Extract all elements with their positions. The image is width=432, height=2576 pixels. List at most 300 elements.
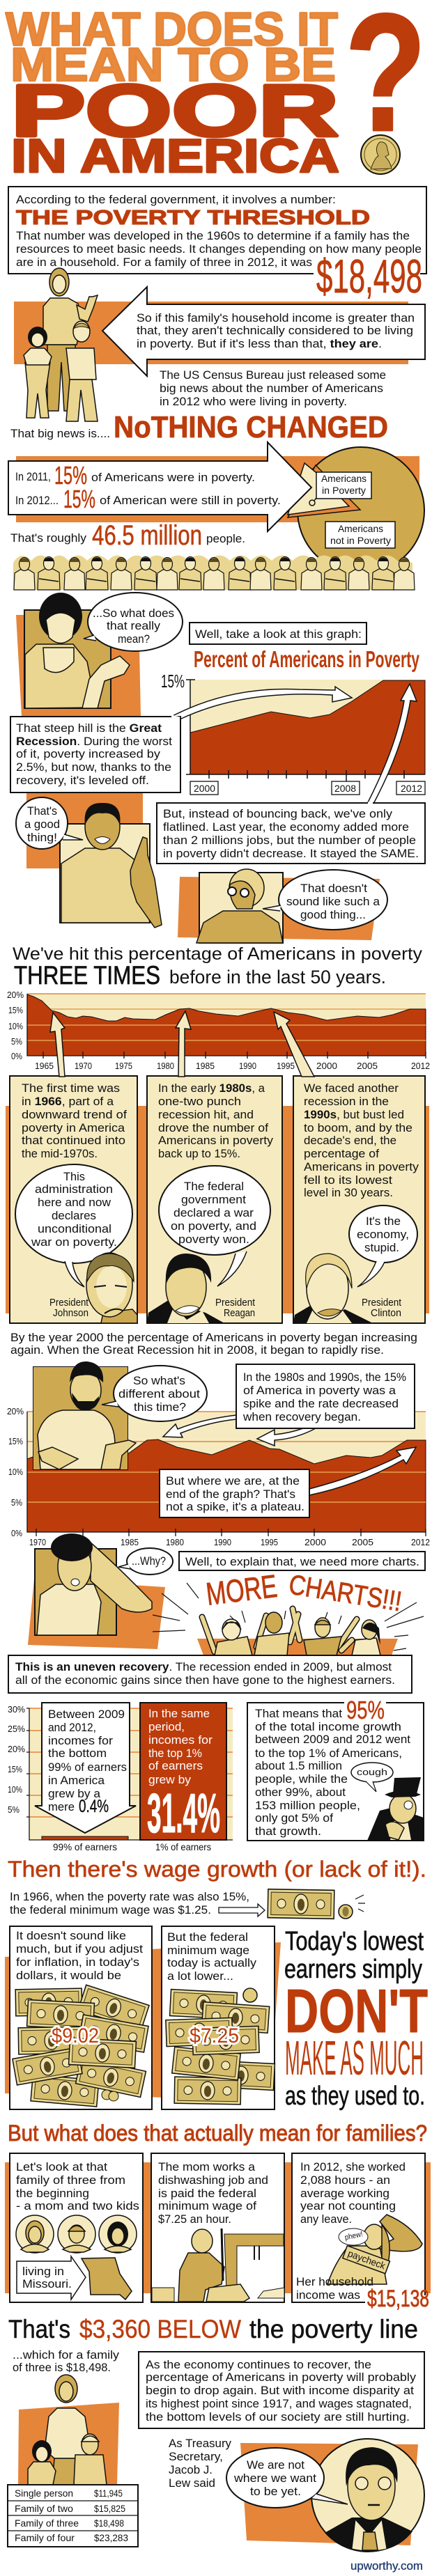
label: President: [215, 1297, 256, 1309]
text: by the year 2000: again. When the Great Recession hit in 2008, it began to rapidly rise.: [10, 1343, 384, 1357]
text: household income: income was: [296, 2288, 360, 2302]
arrow with text: bottom 99 percent: [35, 1703, 136, 1833]
axis labels: [7, 990, 24, 1061]
axis labels: 25%: [8, 1724, 25, 1734]
arrow with text: bottom 99 percent: mere: [48, 1800, 75, 1813]
credit: upworthy: upworthy.com: [350, 2559, 423, 2573]
text: 2011: [15, 461, 255, 490]
sign: paycheck: paycheck: [346, 2247, 387, 2272]
axis labels: 0%: [11, 1052, 22, 1061]
year labels: [35, 1061, 430, 1071]
heading: more charts: [204, 1568, 403, 1617]
label: Clinton: [371, 1307, 401, 1319]
text: [158, 2160, 268, 2226]
speech bubble: here and now: [38, 1196, 111, 1209]
panel: paycheck: [292, 2153, 429, 2312]
heading: below the poverty line: That's: [8, 2315, 70, 2343]
arrow: [176, 1011, 191, 1077]
text: to boom, and by the: [304, 1121, 412, 1134]
text: that continued into: [22, 1134, 125, 1147]
year labels: [190, 781, 425, 795]
callout: flatlined: flatlined. Last year, the economy added more: [163, 820, 409, 834]
text: - a mom and two kids: [16, 2199, 139, 2212]
illustration: woman with paycheck: [327, 2215, 422, 2284]
label: in poverty: [309, 472, 371, 506]
year labels: 1970: [29, 1538, 46, 1547]
text: The first time was: [22, 1082, 120, 1095]
table: thresholds by family size: [8, 2485, 138, 2547]
text: 2012: In 2012...: [15, 494, 59, 507]
text: We faced another: [304, 1082, 399, 1095]
callout: spike: [236, 1364, 415, 1428]
speech bubble: So what's: [133, 1374, 185, 1387]
year labels: 1985: [121, 1538, 139, 1547]
speech bubble: declares: [52, 1209, 96, 1222]
cloud: phew: phew!: [344, 2230, 364, 2242]
panel: johnson: [10, 1013, 137, 1323]
table: thresholds by family size: $23,283: [94, 2532, 128, 2543]
pie chart: [288, 447, 424, 574]
number: $7.25: [190, 2024, 239, 2047]
table: thresholds by family size: $11,945: [94, 2488, 123, 2499]
text: threshold explanation: That number was developed in the 1960s to determine if a family has the: [16, 229, 410, 242]
text: poverty in America: [22, 1121, 125, 1134]
callout: spike: In the 1980s and 1990s, the 15%: [243, 1371, 406, 1384]
text: recession in the: [304, 1095, 389, 1108]
text: 2012: [15, 485, 281, 513]
text: 1966 minimum wage: the federal minimum wage was $1.25.: [10, 1903, 211, 1917]
table: thresholds by family size: Family of three: [15, 2518, 79, 2529]
text: only got 5% of: [255, 1811, 333, 1825]
chart: plateau: [7, 1407, 430, 1547]
bar labels: 99% of earners: [53, 1841, 117, 1852]
map: missouri: [82, 2258, 132, 2300]
text: 46.5 million: That's roughly: [10, 531, 87, 545]
year labels: 2008: [334, 783, 356, 794]
text: intro: According to the federal government, it involves a number:: [16, 193, 336, 206]
year labels: 2000: [316, 1061, 337, 1071]
text: 1966 minimum wage: [10, 1890, 249, 1917]
portraits: [16, 2215, 137, 2253]
text: as treasury secretary: [169, 2437, 231, 2490]
speech bubble: unconditional: [38, 1222, 111, 1235]
text: by the year 2000: By the year 2000 the percentage of Americans in poverty began increasing: [10, 1331, 417, 1344]
speech bubble: [16, 797, 83, 849]
text: people, while the: [255, 1772, 348, 1786]
text: 46.5 million: [10, 520, 245, 551]
callout: steep hill: Recession. During the worst: [16, 735, 172, 748]
panel: clinton: [274, 1012, 425, 1323]
speech bubble: mean?: [118, 632, 150, 646]
arrow with text: bottom 99 percent: grew by a: [48, 1787, 101, 1800]
table: thresholds by family size: $15,825: [94, 2503, 125, 2514]
year labels: 2012: [411, 1538, 430, 1547]
text: is paid the federal: [158, 2187, 256, 2200]
portrait: [293, 1254, 373, 1323]
speech bubble: [15, 1164, 132, 1287]
arrow: to 1980s spike: [163, 1415, 236, 1437]
text: any leave.: [300, 2212, 352, 2226]
arrow: to 1990s spike: [257, 1428, 316, 1446]
arrow with text: bottom 99 percent: and 2012,: [48, 1721, 96, 1734]
table: thresholds by family size: Single person: [15, 2488, 73, 2499]
text: average working: [300, 2187, 389, 2200]
text: census bureau: [160, 368, 386, 408]
text: as treasury secretary: Lew said: [169, 2476, 215, 2490]
callout: spike: of America in poverty was a: [243, 1384, 396, 1397]
speech bubble: economy,: [357, 1228, 409, 1241]
text: between 2009 and 2012 went: [255, 1733, 410, 1746]
bar labels: 1% of earners: [155, 1841, 211, 1852]
speech bubble: ...Why?: [132, 1554, 166, 1568]
text: today is actually: [167, 1956, 257, 1969]
panel orange behind man: [26, 793, 143, 868]
bills: [166, 1988, 275, 2105]
label: not in poverty: [325, 522, 395, 548]
text: $7.25 an hour.: [158, 2212, 231, 2226]
text: 153 million people,: [255, 1799, 360, 1812]
portrait: [311, 2439, 424, 2552]
panel: 7.25: [162, 1926, 275, 2109]
text: about 1.5 million: [255, 1759, 342, 1772]
text: for inflation, in today's: [16, 1956, 139, 1969]
text: census bureau: The US Census Bureau just released some: [160, 368, 386, 382]
chart: 50 years poverty: [7, 990, 430, 1071]
text: speech: that, they aren't technically considered to be living: [137, 324, 413, 337]
panel: bearded man: [33, 1361, 207, 1469]
text: level in 30 years.: [304, 1186, 393, 1199]
text: the mid-1970s.: [22, 1147, 98, 1160]
text: as treasury secretary: Secretary,: [169, 2450, 223, 2463]
text: lowest earners: [284, 1927, 428, 2111]
callout: uneven recovery: [8, 1655, 412, 1693]
text: [167, 1930, 257, 1983]
heading: below the poverty line: $3,360 BELOW: [79, 2315, 241, 2343]
callout: uneven recovery: all of the economic gains since then have gone to the highest earners.: [15, 1673, 395, 1687]
callout: spike: spike and the rate decreased: [243, 1397, 399, 1410]
speech bubble: [263, 870, 387, 930]
speech bubble: This: [63, 1170, 85, 1183]
text: threshold explanation: are in a household. For a family of three in 2012, it was: [16, 256, 312, 269]
callout: take a look: [190, 623, 367, 644]
speech bubble: [349, 1205, 417, 1287]
speech bubble: government: [181, 1193, 246, 1206]
illustration: crowd: [13, 556, 415, 590]
text: year not counting: [300, 2199, 396, 2212]
text: as treasury secretary: Jacob J.: [169, 2463, 213, 2476]
text: recession hit, and: [158, 1108, 254, 1121]
bar labels: [53, 1841, 211, 1852]
text: the beginning: [16, 2187, 89, 2200]
bar: top 1 percent: [140, 1703, 226, 1844]
speech bubble: [118, 1548, 173, 1575]
axis labels: 20%: [7, 990, 24, 1000]
text: by the year 2000: [10, 1331, 417, 1357]
speech bubble: this time?: [134, 1400, 186, 1414]
year labels: 1980: [166, 1538, 184, 1547]
axis labels: 10%: [8, 1785, 22, 1795]
title: WHAT DOES IT: [6, 3, 338, 56]
speech bubble: sound like such a: [286, 895, 380, 908]
arrow with text: bottom 99 percent: Between 2009: [48, 1708, 125, 1721]
panel: dishwashing: [151, 2153, 284, 2302]
text: [16, 1929, 143, 1982]
bar: top 1 percent: 31.4%: [147, 1782, 220, 1844]
year labels: 2005: [357, 1061, 378, 1071]
panel: conclusion: its highest point since 1917, and wages stagnated,: [146, 2397, 412, 2410]
arrow: living in missouri: [17, 2256, 86, 2300]
callout: plateau: But where we are, at the: [166, 1474, 300, 1488]
text: [158, 1082, 274, 1160]
speech bubble: [84, 593, 183, 651]
arrow: to plateau: [309, 1447, 416, 1495]
text: which for a family: ...which for a family: [13, 2348, 120, 2362]
table: thresholds by family size: Family of four: [15, 2532, 75, 2543]
panel: 9.02: [10, 1926, 152, 2109]
bar: top 1 percent: In the same: [148, 1707, 210, 1720]
speech bubble: good thing...: [300, 908, 366, 921]
speech bubble: thing!: [27, 831, 57, 844]
title: MEAN TO BE: [10, 38, 336, 91]
title: POOR: [11, 70, 339, 152]
text: speech: So if this family's household income is greater than: [137, 311, 415, 325]
text: drove the number of: [158, 1121, 268, 1134]
text: [300, 2160, 406, 2226]
label: President: [49, 1297, 89, 1309]
year labels: [29, 1538, 430, 1547]
arrow with text: bottom 99 percent: in America: [48, 1774, 105, 1787]
text: 2,088 hours - an: [300, 2173, 390, 2187]
number: $9.02: [52, 2024, 99, 2047]
text: 2011: In 2011,: [15, 470, 51, 483]
bar: top 1 percent: the top 1%: [148, 1747, 202, 1760]
callout: flatlined: But, instead of bouncing back, we've only: [163, 807, 393, 820]
label: Reagan: [224, 1307, 255, 1319]
axis labels: 5%: [8, 1805, 20, 1815]
label: Johnson: [53, 1307, 88, 1319]
text: dishwashing job and: [158, 2173, 268, 2187]
arrow box: [8, 442, 311, 531]
heading: three times: before in the last 50 years.: [169, 967, 386, 988]
cough bubble: [351, 1763, 393, 1792]
axis labels: 15%: [8, 1006, 23, 1015]
heading: below the poverty line: [8, 2315, 418, 2343]
panel: poverty threshold: [8, 187, 426, 303]
heading: wage growth: Then there's wage growth (or lack of it!).: [8, 1857, 426, 1882]
speech bubble: That doesn't: [300, 882, 367, 895]
year labels: 1990: [239, 1061, 256, 1071]
text: [304, 1082, 419, 1199]
text: a lot lower...: [167, 1969, 233, 1983]
callout: steep hill: of it, poverty increased by: [16, 747, 161, 760]
axis label: 15 percent: 15%: [161, 671, 185, 692]
text: census bureau: in 2012 who were living in poverty.: [160, 395, 347, 408]
panel: 95 percent: [247, 1696, 424, 1841]
axis labels: [7, 1407, 24, 1538]
speech bubble: [159, 1166, 270, 1286]
orange band families: [5, 2162, 431, 2293]
text: in 1966, part of a: [22, 1095, 114, 1108]
year labels: 1980: [157, 1061, 174, 1071]
text: It doesn't sound like: [16, 1929, 126, 1942]
heading: more charts: CHARTS!!!: [287, 1569, 403, 1617]
text: one-two punch: [158, 1095, 241, 1108]
text: decade's end, the: [304, 1134, 396, 1147]
text: which for a family: [13, 2348, 120, 2374]
arrow with text: bottom 99 percent: 0.4%: [79, 1797, 109, 1816]
heading: below the poverty line: the poverty line: [249, 2315, 418, 2343]
label: in poverty: in Poverty: [322, 485, 366, 496]
panel: family of three: [10, 2153, 143, 2302]
text: family of three from: [16, 2173, 125, 2187]
bar: top 1 percent: incomes for: [148, 1733, 213, 1747]
axis labels: 30%: [8, 1705, 25, 1715]
axis labels: 20%: [8, 1744, 25, 1754]
bar: top 1 percent: grew by: [148, 1773, 192, 1786]
illustration: cheering people: [153, 1583, 424, 1655]
text: threshold explanation: [16, 229, 422, 269]
text: 2011: of Americans were in poverty.: [91, 471, 255, 484]
illustration: kitchen: [152, 2228, 284, 2302]
label: [215, 1297, 256, 1319]
speech bubble: where we want: [233, 2472, 316, 2485]
heading: three times: THREE TIMES: [14, 961, 160, 990]
callout: uneven recovery: This is an uneven recovery. The recession ended in 2009, but almost: [15, 1660, 392, 1673]
text: 1990s, but bust led: [304, 1108, 404, 1121]
axis labels: 10%: [8, 1467, 23, 1477]
bar: top 1 percent: period,: [148, 1720, 185, 1733]
axis labels: 15%: [8, 1437, 23, 1446]
speech bubble: that really: [107, 619, 161, 632]
title: IN AMERICA: [11, 130, 339, 182]
axis labels: 20%: [7, 1407, 24, 1416]
speech bubble: to be yet.: [250, 2485, 301, 2498]
text: 2011: 15%: [54, 461, 87, 490]
label: not in poverty: Americans: [338, 523, 383, 534]
year labels: 2012: [401, 783, 422, 794]
text: 2012: 15%: [63, 485, 95, 513]
year labels: 2000: [194, 783, 215, 794]
chart: 2000 to 2012: [161, 671, 425, 795]
year labels: 2005: [352, 1538, 373, 1547]
arrow: living in missouri: living in: [22, 2265, 64, 2278]
speech bubble: The federal: [184, 1180, 244, 1193]
axis labels: 15%: [8, 1765, 22, 1774]
panel: jacob lew: [226, 2439, 424, 2552]
text: [16, 2160, 139, 2212]
text: minimum wage of: [158, 2199, 256, 2212]
callout: steep hill: [10, 716, 180, 793]
callout: steep hill: recovery, it's leveled off.: [16, 774, 149, 787]
text: of the total income growth: [255, 1720, 401, 1733]
year labels: 1965: [35, 1061, 54, 1071]
text: that growth.: [255, 1825, 321, 1838]
heading: more charts: MORE: [204, 1568, 279, 1612]
speech bubble: [226, 2448, 348, 2508]
speech bubble: poverty won.: [178, 1233, 249, 1246]
text: household income: Her household: [296, 2275, 373, 2288]
text: which for a family: of three is $18,498.: [13, 2361, 111, 2374]
callout: flatlined: in poverty didn't decrease. It stayed the SAME.: [163, 847, 419, 860]
text: downward trend of: [22, 1108, 127, 1121]
text: Let's look at that: [16, 2160, 107, 2173]
year labels: 2000: [304, 1538, 326, 1547]
label: President: [362, 1297, 402, 1309]
illustration: family: [24, 268, 98, 421]
table: thresholds by family size: $18,498: [94, 2518, 124, 2529]
chart: income growth: [8, 1703, 233, 1852]
portrait: [147, 1254, 224, 1323]
panel: 15 percent with pie chart: [8, 442, 424, 574]
text: 46.5 million: 46.5 million: [92, 520, 202, 551]
speech bubble: We are not: [247, 2458, 304, 2472]
callout: spike: when recovery began.: [242, 1410, 361, 1423]
arrow: [274, 1012, 314, 1077]
panel: conclusion: the bottom levels of our society are still hurting.: [146, 2410, 410, 2423]
year labels: 1995: [261, 1538, 278, 1547]
text: minimum wage: [167, 1944, 249, 1957]
arrow: living in missouri: Missouri.: [22, 2277, 72, 2290]
panel: conclusion: [139, 2352, 424, 2428]
arrow with text: bottom 99 percent: 99% of earners: [48, 1761, 127, 1774]
panel: conclusion: As the economy continues to recover, the: [146, 2358, 371, 2371]
text: [22, 1082, 127, 1160]
speech bubble: different about: [118, 1387, 200, 1400]
speech bubble: war on poverty.: [31, 1235, 117, 1249]
panel: reagan: [147, 1011, 282, 1323]
speech bubble: declared a war: [173, 1206, 254, 1219]
icon: dollar and quarter: [268, 1889, 365, 1919]
callout: steep hill: That steep hill is the Great: [16, 721, 162, 735]
panel: conclusion: begin to drop again. But with income disparity at: [146, 2384, 414, 2397]
axis labels: 5%: [11, 1498, 22, 1508]
text: back up to 15%.: [158, 1147, 240, 1160]
arrow with text: bottom 99 percent: the bottom: [48, 1747, 107, 1760]
text: 1966 minimum wage: In 1966, when the poverty rate was also 15%,: [10, 1890, 249, 1903]
axis labels: 10%: [8, 1022, 23, 1031]
callout: flatlined: than 2 millions jobs, but the number of people: [163, 834, 416, 847]
speech bubble: It's the: [366, 1215, 401, 1228]
speech bubble: [102, 1366, 207, 1421]
text: to the top 1% of Americans,: [255, 1747, 402, 1760]
speech bubble: administration: [35, 1182, 113, 1196]
speech bubble: stupid.: [364, 1241, 399, 1254]
text: [255, 1696, 410, 1838]
speech bubble: ...So what does: [93, 607, 174, 620]
text: That means that: [255, 1707, 342, 1720]
year labels: 1990: [214, 1538, 231, 1547]
text: fell to its lowest: [304, 1173, 392, 1187]
table: thresholds by family size: Family of two: [15, 2503, 73, 2514]
speech bubble: on poverty, and: [171, 1219, 256, 1233]
arrow: [50, 1013, 65, 1077]
text: threshold explanation: resources to meet basic needs. It changes depending on how many people: [16, 242, 422, 256]
callout: more charts: [179, 1552, 425, 1570]
illustration: rich man: [367, 1777, 424, 1841]
heading: the poverty threshold: THE POVERTY THRESHOLD: [16, 207, 370, 229]
speech bubble: a good: [24, 818, 60, 831]
axis labels: 5%: [11, 1037, 22, 1047]
panel: girl asking: [16, 593, 183, 716]
orange band behind presidents: [6, 1106, 429, 1313]
label: in poverty: Americans: [321, 473, 367, 484]
label: [362, 1297, 402, 1319]
heading: three times: We've hit this percentage of Americans in poverty: [13, 944, 423, 964]
callout: take a look: Well, take a look at this graph:: [195, 627, 362, 641]
text: Americans in poverty: [304, 1160, 419, 1173]
callout: flatlined: [157, 803, 425, 864]
callout: steep hill: 2.5%, but now, thanks to the: [16, 760, 171, 774]
